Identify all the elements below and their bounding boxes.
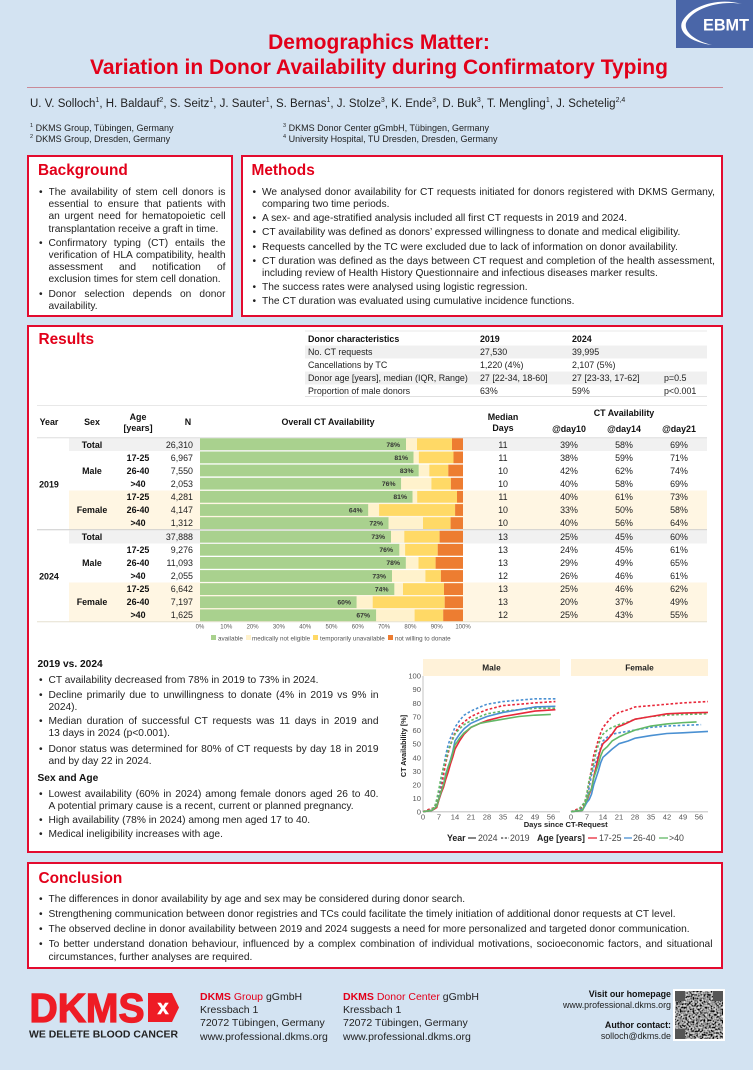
percentage axis: 50% xyxy=(325,624,338,630)
table: donor characteristics: 27,530 xyxy=(480,347,507,357)
table: donor characteristics: 39,995 xyxy=(572,347,599,357)
x axis labels: 0 xyxy=(569,812,573,822)
header row: Days xyxy=(492,423,514,433)
contact block: www.professional.dkms.org Author contact: xyxy=(563,1000,671,1030)
column: median days: 10 xyxy=(498,479,508,489)
bullet: further analyses: To better understand donation behaviour, influenced by a complex combination of individual motivations, socioeconomic factors, and situational xyxy=(48,939,712,950)
bullet: confirmatory typing: Confirmatory typing (CT) entails the xyxy=(48,238,226,249)
bullet: stem cell donors xyxy=(48,187,226,236)
contact block: Visit our homepage xyxy=(589,989,671,999)
column: median days: 10 xyxy=(498,518,508,528)
table: overall CT availability by year, sex and age xyxy=(37,405,707,642)
column: day10: 39% xyxy=(560,440,578,450)
bullet: donor search: The differences in donor availability by age and sex may be considered during donor search. xyxy=(48,894,465,905)
bullet: stem cell donors: The availability of stem cell donors is xyxy=(48,187,226,198)
bullet: confirmatory typing xyxy=(48,238,226,286)
column: median days: 13 xyxy=(498,584,508,594)
column: day10: 33% xyxy=(560,505,578,515)
subheading: sex and age: Sex and Age xyxy=(38,773,98,784)
column: N: 11,093 xyxy=(166,558,193,568)
y axis: 100 xyxy=(408,672,421,680)
column: day10: 29% xyxy=(560,558,578,568)
table: donor characteristics: Donor characteristics xyxy=(308,334,399,344)
column: day10: 20% xyxy=(560,597,578,607)
group labels: 26-40 xyxy=(127,505,149,515)
column: N: 9,276 xyxy=(171,545,193,555)
x axis labels: 7 xyxy=(437,812,441,822)
chart legend: 2019 xyxy=(510,833,530,843)
column: N: 2,055 xyxy=(171,571,193,581)
column: day10: 40% xyxy=(560,479,578,489)
group labels: 17-25 xyxy=(127,545,149,555)
chart: cumulative incidence of CT availability xyxy=(399,659,708,843)
header row: [years] xyxy=(123,423,153,433)
bullet: analysed: We analysed donor availability for CT requests initiated for donors registered with DKMS Germany, xyxy=(262,187,715,198)
contact block xyxy=(563,989,671,1041)
bullet: median duration xyxy=(48,716,378,740)
curves: female xyxy=(571,702,708,812)
column: N: 4,281 xyxy=(171,492,193,502)
group labels: Female xyxy=(77,597,107,607)
address: DKMS Group xyxy=(200,991,328,1043)
table: donor characteristics: 2024 xyxy=(572,334,592,344)
column: N: 2,053 xyxy=(171,479,193,489)
facet header: male: Male xyxy=(482,662,501,672)
bar value labels: 78% xyxy=(386,442,400,449)
y axis: 30 xyxy=(413,767,421,776)
bullet: communication: Strengthening communication between donor registries and TCs could facilitate the timely initiation of additional donor requests at CT level. xyxy=(48,909,676,920)
column: N: 7,550 xyxy=(171,466,193,476)
table: donor characteristics: 59% xyxy=(572,386,590,396)
x axis labels: 49 xyxy=(531,812,539,822)
contact block: solloch@dkms.de xyxy=(601,1031,671,1041)
table: donor characteristics xyxy=(305,330,707,397)
logo: DKMS xyxy=(29,985,179,1040)
column: median days: 13 xyxy=(498,532,508,542)
bullet: confirmatory typing: assessment and notification of xyxy=(48,262,226,273)
bullet: donor selection: availability. xyxy=(48,301,98,312)
bar value labels: 76% xyxy=(382,481,396,488)
bullet: median duration: Median duration of successful CT requests was 11 days in 2019 and xyxy=(48,716,378,727)
column: day10 xyxy=(560,440,578,620)
column: day21: 58% xyxy=(670,505,688,515)
y axis: 20 xyxy=(413,780,421,790)
column: day10: 42% xyxy=(560,466,578,476)
title xyxy=(90,30,668,79)
address: DKMS Group: www.professional.dkms.org xyxy=(200,1031,328,1043)
chart legend: Year xyxy=(447,833,466,843)
panel: methods xyxy=(241,155,723,317)
column: median days: 13 xyxy=(498,558,508,568)
percentage axis xyxy=(196,624,471,630)
bullet: further analyses xyxy=(48,939,712,964)
column: N: 6,642 xyxy=(171,584,193,594)
x axis labels: 35 xyxy=(647,812,655,822)
affiliations right: 4 University Hospital, TU Dresden, Dresden, Germany xyxy=(283,134,497,144)
bullet: donor status: Donor status was determined for 80% of CT requests by day 18 in 2019 xyxy=(48,744,378,755)
bullet: cumulative incidence: The CT duration was evaluated using cumulative incidence functions. xyxy=(262,296,574,307)
group labels: 26-40 xyxy=(127,558,149,568)
column: day21: 69% xyxy=(670,440,688,450)
percentage axis: 100% xyxy=(455,624,471,630)
bar value labels xyxy=(337,442,414,620)
address: DKMS Donor Center: Kressbach 1 xyxy=(343,1004,401,1016)
table: donor characteristics: Cancellations by TC xyxy=(308,360,388,370)
group labels: >40 xyxy=(130,571,146,581)
chart legend: 26-40 xyxy=(633,833,656,843)
bullet: median duration: 13 days in 2024 (p<0.001). xyxy=(48,728,170,739)
column: median days: 10 xyxy=(498,466,508,476)
column: day10: 40% xyxy=(560,518,578,528)
column: median days: 11 xyxy=(498,492,508,502)
logo: DKMS: WE DELETE BLOOD CANCER xyxy=(29,1030,178,1040)
logo: DKMS: x xyxy=(157,997,169,1019)
heading: conclusion: Conclusion xyxy=(38,870,122,886)
affiliations left: 2 DKMS Group, Dresden, Germany xyxy=(30,134,170,144)
bullet: stratified analysis: A sex- and age-stratified analysis included all first CT requests in 2019 and 2024. xyxy=(262,213,627,224)
column: day14: 46% xyxy=(615,584,633,594)
logo: EBMT xyxy=(676,0,753,48)
y axis: 10 xyxy=(413,794,421,803)
percentage axis: 40% xyxy=(299,624,312,630)
bullet: decline unwillingness: 2024). xyxy=(48,702,77,713)
bar legend: temporarily unavailable xyxy=(320,635,385,642)
table: donor characteristics: 2019 xyxy=(480,334,500,344)
column: day14: 45% xyxy=(615,532,633,542)
header row: Overall CT Availability xyxy=(281,417,375,427)
column: N: 1,312 xyxy=(171,518,193,528)
y axis: 0 xyxy=(417,808,421,816)
column: day21: 69% xyxy=(670,479,688,489)
address: DKMS Group: DKMS Group gGmbH xyxy=(200,991,302,1003)
title: Variation in Donor Availability during Confirmatory Typing xyxy=(90,56,668,79)
x axis labels: 49 xyxy=(679,812,687,822)
table: donor characteristics: Proportion of male donors xyxy=(308,386,411,396)
address: DKMS Donor Center: DKMS Donor Center gGmbH xyxy=(343,991,479,1003)
header row: Year xyxy=(40,417,59,427)
percentage axis: 0% xyxy=(196,624,205,630)
column: day14: 46% xyxy=(615,571,633,581)
x axis labels: 56 xyxy=(547,812,555,822)
facet header: male xyxy=(423,659,560,676)
heading: results: Results xyxy=(38,331,94,348)
x axis labels: 14 xyxy=(451,812,459,822)
curves: male xyxy=(423,699,555,812)
table: donor characteristics: 27 [23-33, 17-62] xyxy=(572,373,640,383)
x axis labels: 28 xyxy=(631,812,639,822)
panel: conclusion xyxy=(27,862,723,969)
group labels: >40 xyxy=(130,610,146,620)
column: day10: 24% xyxy=(560,545,578,555)
address: DKMS Donor Center: 72072 Tübingen, Germany xyxy=(343,1017,468,1029)
y axis: 40 xyxy=(413,754,421,762)
bullet: decline unwillingness: Decline primarily due to unwillingness to donate (4% in 2019 vs 9% in xyxy=(48,690,378,701)
x axis labels: 35 xyxy=(499,812,507,822)
bullet: CT duration: CT duration was defined as the days between CT request and completion of the health assessment, xyxy=(262,256,715,267)
column: day21: 61% xyxy=(670,571,688,581)
bullet: donor selection xyxy=(48,289,226,313)
column: day14: 56% xyxy=(615,518,633,528)
y axis: 90 xyxy=(413,685,421,694)
chart legend xyxy=(447,833,684,843)
header row: @day10 xyxy=(552,424,586,434)
percentage axis: 30% xyxy=(273,624,286,630)
bar value labels: 72% xyxy=(369,520,383,528)
column: N xyxy=(166,440,193,620)
x axis labels: 0 xyxy=(421,812,425,822)
bar value labels: 76% xyxy=(379,547,393,554)
affiliations left xyxy=(30,122,174,144)
header row: N xyxy=(185,417,191,427)
column: N: 37,888 xyxy=(166,532,193,542)
column: median days: 13 xyxy=(498,597,508,607)
bar value labels: 83% xyxy=(400,468,414,475)
header row xyxy=(37,406,707,434)
table: donor characteristics: 2,107 (5%) xyxy=(572,360,615,370)
percentage axis: 20% xyxy=(247,624,259,630)
group labels: 17-25 xyxy=(127,453,149,463)
bullet: donor selection: Donor selection depends on donor xyxy=(48,289,226,300)
column: day14: 61% xyxy=(615,492,633,502)
column: day21: 62% xyxy=(670,584,688,594)
header row: CT Availability xyxy=(594,408,654,418)
bullet: medical ineligibility: Medical ineligibility increases with age. xyxy=(48,829,223,840)
group labels: 2019 xyxy=(39,480,59,490)
x axis labels: 7 xyxy=(585,812,589,822)
x axis labels: 14 xyxy=(599,812,607,822)
bar value labels: 64% xyxy=(349,508,362,514)
percentage axis: 90% xyxy=(431,624,443,630)
stacked bars xyxy=(200,438,463,621)
bar value labels: 60% xyxy=(337,600,351,606)
bullet: stem cell donors: essential to ensure that patients with xyxy=(48,199,226,210)
table: donor characteristics: Donor age [years], median (IQR, Range) xyxy=(308,373,468,383)
column: day10: 25% xyxy=(560,584,578,594)
column: day21: 64% xyxy=(670,518,688,528)
column: day21: 74% xyxy=(670,466,688,476)
chart legend: >40 xyxy=(669,833,684,843)
bullet: stem cell donors: an urgent need for hematopoietic cell xyxy=(48,211,226,222)
subheading: 2019 vs. 2024: 2019 vs. 2024 xyxy=(38,659,103,670)
column: median days: 10 xyxy=(498,505,508,515)
group labels: 17-25 xyxy=(127,584,149,594)
bar value labels: 73% xyxy=(372,574,386,580)
bullet: lowest availability: A potential primary cause is a recent, current or planned pregnancy. xyxy=(48,801,354,812)
bullet: CT duration xyxy=(262,256,715,280)
chart legend: 2024 xyxy=(478,833,498,843)
header row: Sex xyxy=(84,417,100,427)
x axis labels: Days since CT-Request xyxy=(524,820,608,829)
table: donor characteristics: 27 [22-34, 18-60] xyxy=(480,373,548,383)
bar value labels: 81% xyxy=(393,494,407,501)
address: DKMS Group: 72072 Tübingen, Germany xyxy=(200,1017,325,1029)
bullet: logistic regression: The success rates were analysed using logistic regression. xyxy=(262,282,528,293)
bullet: availability decreased: CT availability decreased from 78% in 2019 to 73% in 2024. xyxy=(48,675,318,686)
bullet: CT duration: including review of Health History Questionnaire and infectious diseases marker results. xyxy=(262,268,658,279)
table: donor characteristics: 1,220 (4%) xyxy=(480,360,523,370)
facet header: female: Female xyxy=(625,662,654,672)
column: N: 7,197 xyxy=(171,597,193,607)
column: day10: 25% xyxy=(560,532,578,542)
header row: @day14 xyxy=(607,424,641,434)
title: Demographics Matter: xyxy=(268,30,490,54)
x axis labels: 42 xyxy=(515,812,523,822)
column: median days xyxy=(498,440,508,620)
bar legend: available xyxy=(218,635,243,642)
bullet: lowest availability xyxy=(48,789,378,813)
column: day14: 62% xyxy=(615,466,633,476)
group labels: Male xyxy=(82,558,102,568)
percentage axis: 70% xyxy=(378,624,391,630)
table: donor characteristics: p<0.001 xyxy=(664,386,696,396)
bar legend: not willing to donate xyxy=(395,635,451,642)
column: day14: 37% xyxy=(615,597,633,607)
header row: Median xyxy=(488,412,518,422)
column: N: 26,310 xyxy=(166,440,193,450)
bullet: lowest availability: Lowest availability (60% in 2024) among female donors aged 26 to 40. xyxy=(48,789,378,800)
column: day10: 40% xyxy=(560,492,578,502)
bullet: confirmatory typing: exclusion times for stem cell donation. xyxy=(48,274,221,285)
column: day21: 65% xyxy=(670,558,688,568)
x axis labels xyxy=(421,812,703,829)
column: day14: 50% xyxy=(615,505,633,515)
bullet: high availability: High availability (78% in 2024) among men aged 17 to 40. xyxy=(48,815,310,826)
bullet: donor status: and by day 22 in 2024. xyxy=(48,756,152,767)
bar legend: medically not eligible xyxy=(252,635,311,642)
column: day10: 26% xyxy=(560,571,578,581)
address: DKMS Donor Center xyxy=(343,991,479,1043)
group labels: 17-25 xyxy=(127,492,149,502)
table: donor characteristics: p=0.5 xyxy=(664,373,687,383)
column: median days: 13 xyxy=(498,545,508,555)
logo: DKMS: DKMS xyxy=(30,985,144,1031)
bar value labels: 67% xyxy=(356,612,370,620)
column: day21 xyxy=(670,440,688,620)
column: day21: 61% xyxy=(670,545,688,555)
column: median days: 12 xyxy=(498,610,508,620)
percentage axis: 80% xyxy=(404,624,417,630)
table: donor characteristics: No. CT requests xyxy=(308,347,373,357)
address: DKMS Group: Kressbach 1 xyxy=(200,1004,258,1016)
bullet: analysed: comparing two time periods. xyxy=(262,199,389,210)
bar legend xyxy=(211,635,451,642)
y axis: 70 xyxy=(413,712,421,722)
y axis: 50 xyxy=(413,740,421,748)
percentage axis: 60% xyxy=(352,624,364,630)
group labels: Total xyxy=(82,440,102,450)
x axis labels: 56 xyxy=(695,812,703,822)
y axis: CT Availability [%] xyxy=(399,715,408,777)
y axis: 60 xyxy=(413,726,421,735)
y axis: 80 xyxy=(413,699,421,708)
bullet: stem cell donors: transplantation receive a graft in time. xyxy=(48,224,218,235)
column: median days: 11 xyxy=(498,453,508,463)
bullet: cancelled requests: Requests cancelled by the TC were excluded due to lack of information on donor availability. xyxy=(262,242,678,253)
column: day21: 71% xyxy=(670,453,688,463)
column: median days: 11 xyxy=(498,440,508,450)
bar value labels: 78% xyxy=(386,560,400,567)
affiliations right: 3 DKMS Donor Center gGmbH, Tübingen, Germany xyxy=(283,122,489,132)
bullet: further analyses: circumstances, further analyses are required. xyxy=(48,952,252,963)
header row: Age xyxy=(130,412,146,422)
column: day14 xyxy=(615,440,633,620)
QR code xyxy=(673,989,725,1041)
x axis labels: 42 xyxy=(663,812,671,822)
panel: background xyxy=(27,155,233,317)
bullet: decline unwillingness xyxy=(48,690,378,714)
header row: @day21 xyxy=(662,424,696,434)
group labels: Total xyxy=(82,532,102,542)
bullet: donor status xyxy=(48,744,378,768)
percentage axis: 10% xyxy=(220,624,233,630)
group labels: >40 xyxy=(130,518,146,528)
x axis labels: 21 xyxy=(467,812,475,822)
column: day14: 59% xyxy=(615,453,633,463)
column: day14: 58% xyxy=(615,440,633,450)
address: DKMS Donor Center: www.professional.dkms.org xyxy=(343,1031,471,1043)
group labels: >40 xyxy=(130,479,146,489)
column: N: 4,147 xyxy=(171,505,193,515)
bullet: availability definition: CT availability was defined as donors’ expressed willingness to donate and medical eligibility. xyxy=(262,227,680,238)
column: day21: 73% xyxy=(670,492,688,502)
bullet: analysed xyxy=(262,187,715,211)
column: day14: 49% xyxy=(615,558,633,568)
column: day14: 45% xyxy=(615,545,633,555)
heading: methods: Methods xyxy=(252,162,315,179)
column: day21: 49% xyxy=(670,597,688,607)
affiliations left: 1 DKMS Group, Tübingen, Germany xyxy=(30,122,173,132)
logo: EBMT: EBMT xyxy=(703,16,750,34)
group labels: 26-40 xyxy=(127,466,149,476)
column: day14: 58% xyxy=(615,479,633,489)
x axis labels: 28 xyxy=(483,812,491,822)
column: median days: 12 xyxy=(498,571,508,581)
bullet: personalized communication: The observed decline in donor availability between 2019 and 2024 suggests a need for more personalized and targeted donor communication. xyxy=(48,924,690,935)
bullet: confirmatory typing: verification of HLA compatibility, health xyxy=(48,250,226,261)
affiliations right xyxy=(283,122,498,144)
column: day21: 55% xyxy=(670,610,688,620)
bar value labels: 73% xyxy=(371,534,385,541)
table: donor characteristics: 63% xyxy=(480,386,498,396)
bar value labels: 81% xyxy=(394,455,408,462)
group labels xyxy=(39,440,149,620)
column: day14: 43% xyxy=(615,610,633,620)
column: day10: 25% xyxy=(560,610,578,620)
authors: U. V. Solloch1, H. Baldauf2, S. Seitz1, J. Sauter1, S. Bernas1, J. Stolze3, K. Ende3, D. Buk3, T. Mengling1, J. Schetelig2,4 xyxy=(30,97,625,110)
column: N: 1,625 xyxy=(171,610,193,620)
column: day10: 38% xyxy=(560,453,578,463)
chart legend: 17-25 xyxy=(599,833,622,843)
panel: results xyxy=(27,325,723,853)
y axis xyxy=(399,672,421,816)
facet header: female xyxy=(571,659,708,676)
column: day21: 60% xyxy=(670,532,688,542)
heading: background: Background xyxy=(38,162,128,179)
group labels: Male xyxy=(82,466,102,476)
group labels: 26-40 xyxy=(127,597,149,607)
bar value labels: 74% xyxy=(375,586,388,594)
column: N: 6,967 xyxy=(171,453,193,463)
group labels: 2024 xyxy=(39,572,59,582)
x axis labels: 21 xyxy=(615,812,623,822)
group labels: Female xyxy=(77,505,107,515)
chart legend: Age [years] xyxy=(537,833,585,843)
